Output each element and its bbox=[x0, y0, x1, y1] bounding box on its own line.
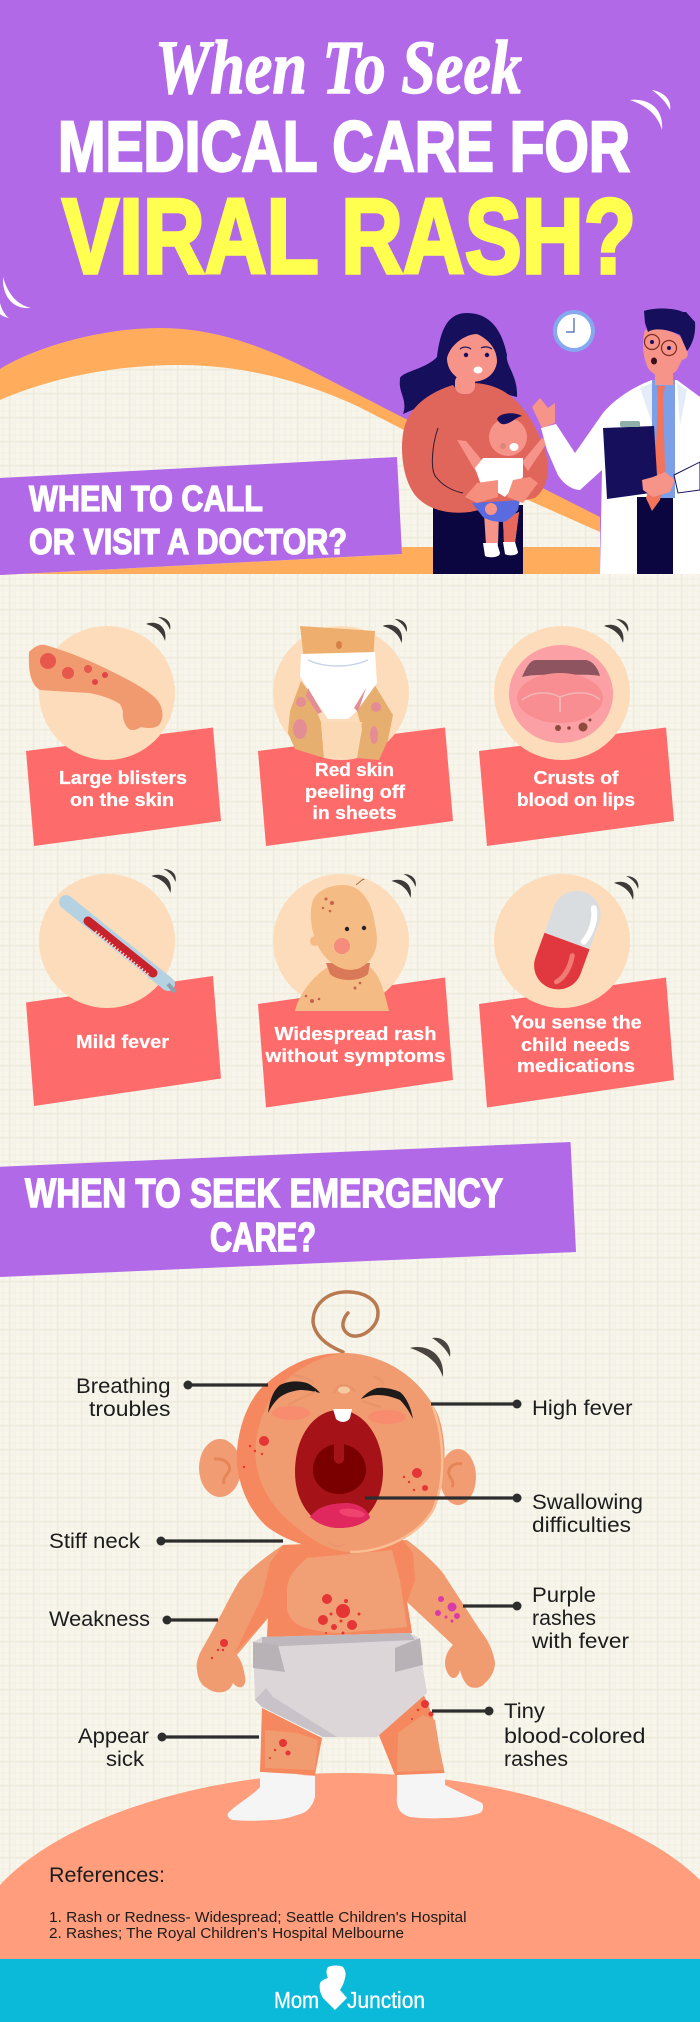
eyelid creases bbox=[288, 1375, 384, 1407]
label bbox=[264, 1023, 446, 1066]
callout: weakness bbox=[49, 1608, 218, 1631]
label bbox=[517, 767, 635, 810]
mother holding baby bbox=[400, 313, 549, 574]
callout: stiff neck: Stiff neck bbox=[49, 1530, 141, 1553]
icon: MomJunction logo bbox=[320, 1966, 347, 2010]
icon: thermometer bbox=[66, 902, 175, 992]
crying baby illustration bbox=[197, 1292, 495, 1821]
label: blood on lips bbox=[517, 789, 635, 810]
references bbox=[49, 1864, 466, 1942]
label: You sense the bbox=[510, 1012, 642, 1032]
callout: tiny blood-colored rashes: blood-colored bbox=[504, 1725, 646, 1748]
chest bbox=[287, 1550, 407, 1633]
callout: breathing troubles bbox=[76, 1375, 268, 1421]
socks bbox=[228, 1772, 483, 1821]
label: Red skin bbox=[315, 759, 394, 780]
callout: breathing troubles: troubles bbox=[89, 1398, 170, 1421]
eyes and brows bbox=[268, 1381, 413, 1419]
baby in arms bbox=[457, 413, 549, 557]
arms and shoulders bbox=[197, 1540, 495, 1692]
panel: large blisters bbox=[26, 617, 221, 846]
label: medications bbox=[517, 1055, 635, 1076]
callout: high fever: High fever bbox=[532, 1397, 632, 1420]
callout: purple rashes with fever: Purple bbox=[532, 1584, 596, 1607]
icon: swoosh bbox=[151, 869, 176, 893]
panel: child needs medications bbox=[479, 874, 674, 1108]
swoosh bbox=[410, 1338, 450, 1377]
callout: swallowing difficulties: difficulties bbox=[532, 1514, 631, 1537]
callout: appear sick: sick bbox=[106, 1748, 145, 1771]
footer bar bbox=[0, 1959, 700, 2022]
label: on the skin bbox=[70, 789, 174, 810]
chin bbox=[328, 1541, 346, 1547]
callout: tiny blood-colored rashes: Tiny bbox=[504, 1700, 546, 1723]
label: Crusts of bbox=[534, 767, 619, 788]
section banner: when to call or visit a doctor bbox=[0, 457, 402, 575]
section banner: when to call or visit a doctor: OR VISIT A DOCTOR? bbox=[29, 521, 347, 562]
legs bbox=[260, 1693, 445, 1775]
icon: white swoosh top right bbox=[630, 90, 670, 130]
icon: mouth bbox=[509, 645, 613, 743]
icon: swoosh bbox=[146, 617, 170, 641]
icon: swoosh bbox=[392, 874, 416, 898]
icon: swoosh bbox=[604, 619, 628, 643]
icon: swoosh bbox=[614, 876, 638, 900]
callout: tiny blood-colored rashes bbox=[432, 1700, 646, 1771]
cheeks bbox=[272, 1406, 310, 1420]
label bbox=[510, 1012, 642, 1076]
label: Large blisters bbox=[59, 767, 187, 788]
diaper bbox=[253, 1633, 427, 1737]
section banner: when to seek emergency care: WHEN TO SEEK EMERGENCY bbox=[25, 1170, 503, 1216]
icon: baby with rash bbox=[295, 879, 389, 1011]
label: Mild fever bbox=[76, 1031, 169, 1052]
callout: tiny blood-colored rashes: rashes bbox=[504, 1748, 568, 1771]
rash spots bbox=[211, 1436, 434, 1759]
callout: stiff neck bbox=[49, 1530, 283, 1553]
clock bbox=[553, 310, 595, 352]
ears bbox=[199, 1439, 476, 1505]
callout: high fever bbox=[431, 1397, 632, 1420]
panel: crusts of blood on lips bbox=[479, 619, 674, 846]
header panel bbox=[0, 0, 700, 575]
label bbox=[305, 759, 406, 823]
references: 1. Rash or Redness- Widespread; Seattle Children's Hospital bbox=[49, 1909, 466, 1926]
callout: appear sick bbox=[78, 1725, 259, 1771]
callout: purple rashes with fever: with fever bbox=[531, 1630, 629, 1653]
label: in sheets bbox=[312, 802, 396, 823]
hair curl bbox=[313, 1292, 378, 1352]
mouth bbox=[295, 1409, 383, 1528]
section banner: when to seek emergency care: CARE? bbox=[210, 1214, 316, 1260]
references: 2. Rashes; The Royal Children's Hospital Melbourne bbox=[49, 1925, 404, 1942]
torso shading bbox=[235, 1540, 415, 1653]
callout: purple rashes with fever bbox=[463, 1584, 629, 1653]
section banner: when to seek emergency care bbox=[0, 1142, 576, 1277]
logo wordmark bbox=[274, 1987, 425, 2013]
peach mound bbox=[0, 1773, 700, 1959]
references: References: bbox=[49, 1864, 165, 1887]
panel: mild fever bbox=[26, 869, 221, 1106]
callout: swallowing difficulties: Swallowing bbox=[532, 1491, 643, 1514]
callout: weakness: Weakness bbox=[49, 1608, 150, 1631]
section banner: when to call or visit a doctor: WHEN TO CALL bbox=[29, 478, 263, 519]
label: child needs bbox=[521, 1034, 630, 1055]
panel: widespread rash bbox=[258, 874, 453, 1108]
label: peeling off bbox=[305, 781, 406, 802]
title: When To Seek bbox=[155, 26, 522, 110]
label bbox=[59, 767, 187, 810]
panel: red skin peeling bbox=[258, 619, 453, 846]
icon: swoosh bbox=[383, 619, 407, 643]
icon: diaper and rash legs bbox=[288, 626, 393, 760]
callout: purple rashes with fever: rashes bbox=[532, 1607, 596, 1630]
logo wordmark: Mom bbox=[274, 1987, 319, 2013]
purple rash spots bbox=[435, 1596, 460, 1622]
title bbox=[58, 26, 636, 296]
callout: breathing troubles: Breathing bbox=[76, 1375, 170, 1398]
icon: white swoosh left bbox=[0, 277, 31, 318]
callout: appear sick: Appear bbox=[78, 1725, 149, 1748]
label: without symptoms bbox=[264, 1045, 446, 1066]
doctor bbox=[532, 308, 700, 574]
nose bbox=[334, 1385, 355, 1394]
wave: orange arc with patterned fill bbox=[0, 328, 600, 575]
icon: capsule pill bbox=[527, 884, 607, 996]
label: Widespread rash bbox=[274, 1023, 436, 1044]
callout: swallowing difficulties bbox=[365, 1491, 643, 1537]
logo wordmark: Junction bbox=[347, 1987, 425, 2013]
head bbox=[237, 1353, 445, 1552]
icon: arm with blisters bbox=[29, 645, 162, 730]
